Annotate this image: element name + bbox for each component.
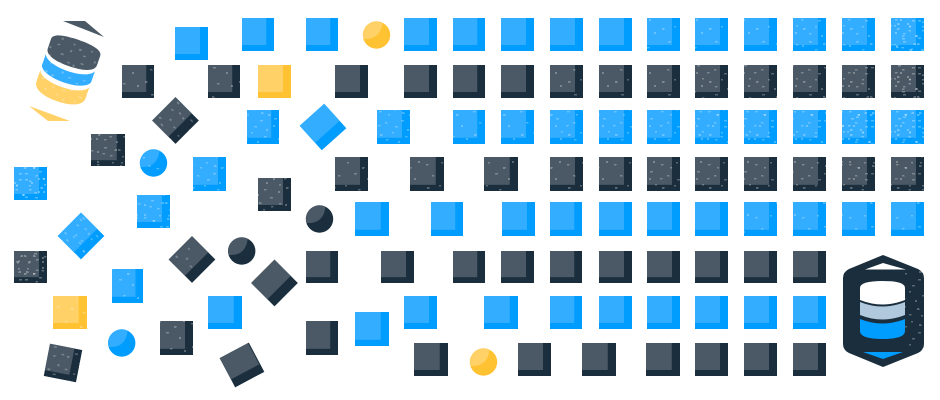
row 4: dark tiles <box>335 157 924 191</box>
scattered tile: dark square <box>122 65 154 98</box>
scattered tile: rotated dark square <box>44 344 82 382</box>
scattered tile: blue square <box>193 157 226 191</box>
icon: tilted database cylinder <box>29 21 104 121</box>
scattered tile: blue square <box>208 296 242 329</box>
badge blue disc <box>860 319 905 339</box>
row 6: dark tiles <box>306 251 826 283</box>
badge speckle <box>905 270 924 350</box>
scattered tile: dark diamond <box>169 236 215 283</box>
scattered tile: blue square <box>137 195 170 228</box>
scattered tile: dark square <box>258 178 291 211</box>
scattered tile: blue diamond <box>300 104 346 150</box>
row 7: blue tiles <box>355 296 826 346</box>
cylinder top triangle <box>63 21 104 37</box>
scattered tile: blue square <box>112 269 143 303</box>
icon: database badge <box>843 255 924 367</box>
scattered tile: dark square <box>208 65 240 98</box>
circle: yellow <box>470 348 497 376</box>
scattered tile: rotated dark square <box>220 343 264 387</box>
cylinder yellow disc <box>32 70 89 110</box>
badge hexagon <box>843 255 924 367</box>
cylinder blue disc <box>39 54 95 91</box>
scattered tile: dark diamond <box>251 260 298 306</box>
circle: dark <box>306 205 333 233</box>
cylinder bottom triangle <box>29 106 70 121</box>
scattered tile: dark diamond <box>152 97 199 144</box>
scattered tile: blue diamond <box>58 213 104 259</box>
scattered tile: dark square <box>160 321 193 355</box>
circle: yellow <box>363 21 390 49</box>
badge top triangle <box>865 263 906 270</box>
cylinder speckle <box>32 31 103 110</box>
row 8: dark tiles <box>306 321 826 376</box>
scattered tile: dark square <box>14 251 47 283</box>
scattered tile: blue square <box>14 167 47 200</box>
badge light blue disc <box>860 302 905 320</box>
cylinder dark disc <box>45 31 103 75</box>
circle: blue <box>140 149 167 177</box>
row 2: dark tiles <box>258 65 924 98</box>
scattered tile: yellow square <box>53 296 87 329</box>
scattered tile: dark square <box>91 134 125 166</box>
badge bottom triangle <box>863 352 903 359</box>
row 1: blue tiles <box>242 18 924 51</box>
row 5: blue tiles <box>355 202 924 236</box>
row 3: blue tiles <box>247 110 924 144</box>
circle: blue <box>108 329 135 357</box>
badge white disc <box>860 281 905 304</box>
circle: dark <box>228 237 255 265</box>
scattered tile: blue square <box>175 27 208 60</box>
